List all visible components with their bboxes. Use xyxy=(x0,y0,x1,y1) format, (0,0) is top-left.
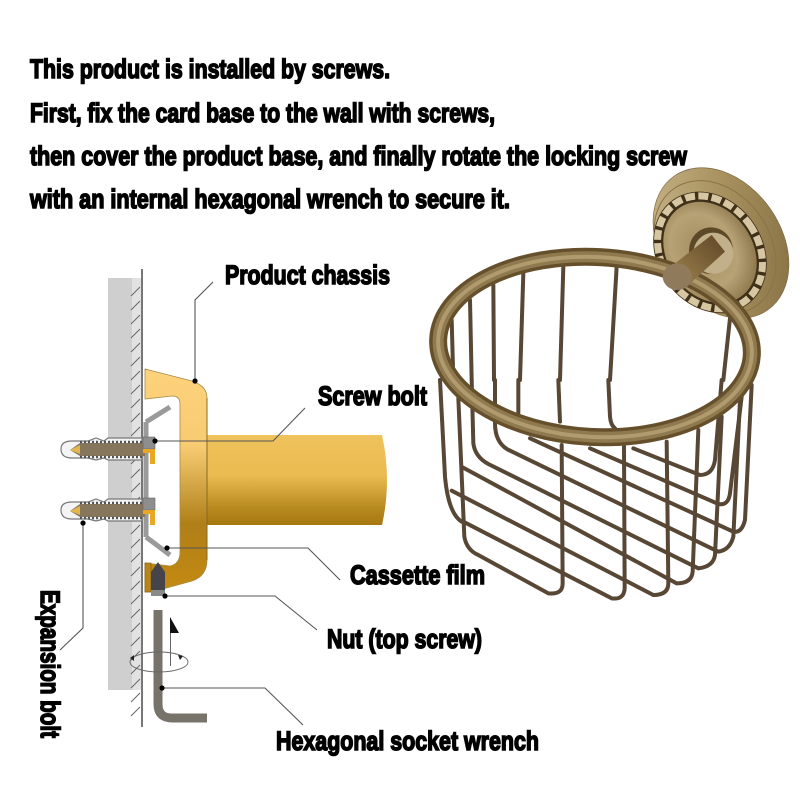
basket ring xyxy=(434,249,756,445)
leader dots xyxy=(80,378,198,691)
hexagonal wrench xyxy=(158,610,207,718)
label: expansion bolt: Expansion bolt xyxy=(35,590,65,738)
product chassis shape xyxy=(145,369,207,592)
product tube xyxy=(207,435,387,525)
nut top screw xyxy=(145,562,165,596)
instructions heading: with an internal hexagonal wrench to secure it. xyxy=(29,184,510,214)
instructions heading: First, fix the card base to the wall with screws, xyxy=(30,98,495,128)
instructions heading: This product is installed by screws. xyxy=(30,54,390,84)
wall section xyxy=(108,269,142,727)
label: product chassis: Product chassis xyxy=(225,260,390,290)
label: hexagonal socket wrench: Hexagonal socket wrench xyxy=(276,726,539,756)
label: screw bolt: Screw bolt xyxy=(318,381,427,411)
installation diagram xyxy=(60,269,387,727)
label: nut top screw: Nut (top screw) xyxy=(327,624,482,654)
label: cassette film: Cassette film xyxy=(350,560,485,590)
wall plate xyxy=(625,142,800,344)
rotation arrow xyxy=(130,617,188,672)
product photo: wire basket holder xyxy=(434,142,800,599)
rear wires xyxy=(440,267,752,599)
instructions heading xyxy=(29,54,688,214)
mounting bracket xyxy=(146,407,170,555)
expansion bolts xyxy=(61,437,155,525)
leader lines xyxy=(60,282,340,725)
mounting post xyxy=(663,235,725,290)
